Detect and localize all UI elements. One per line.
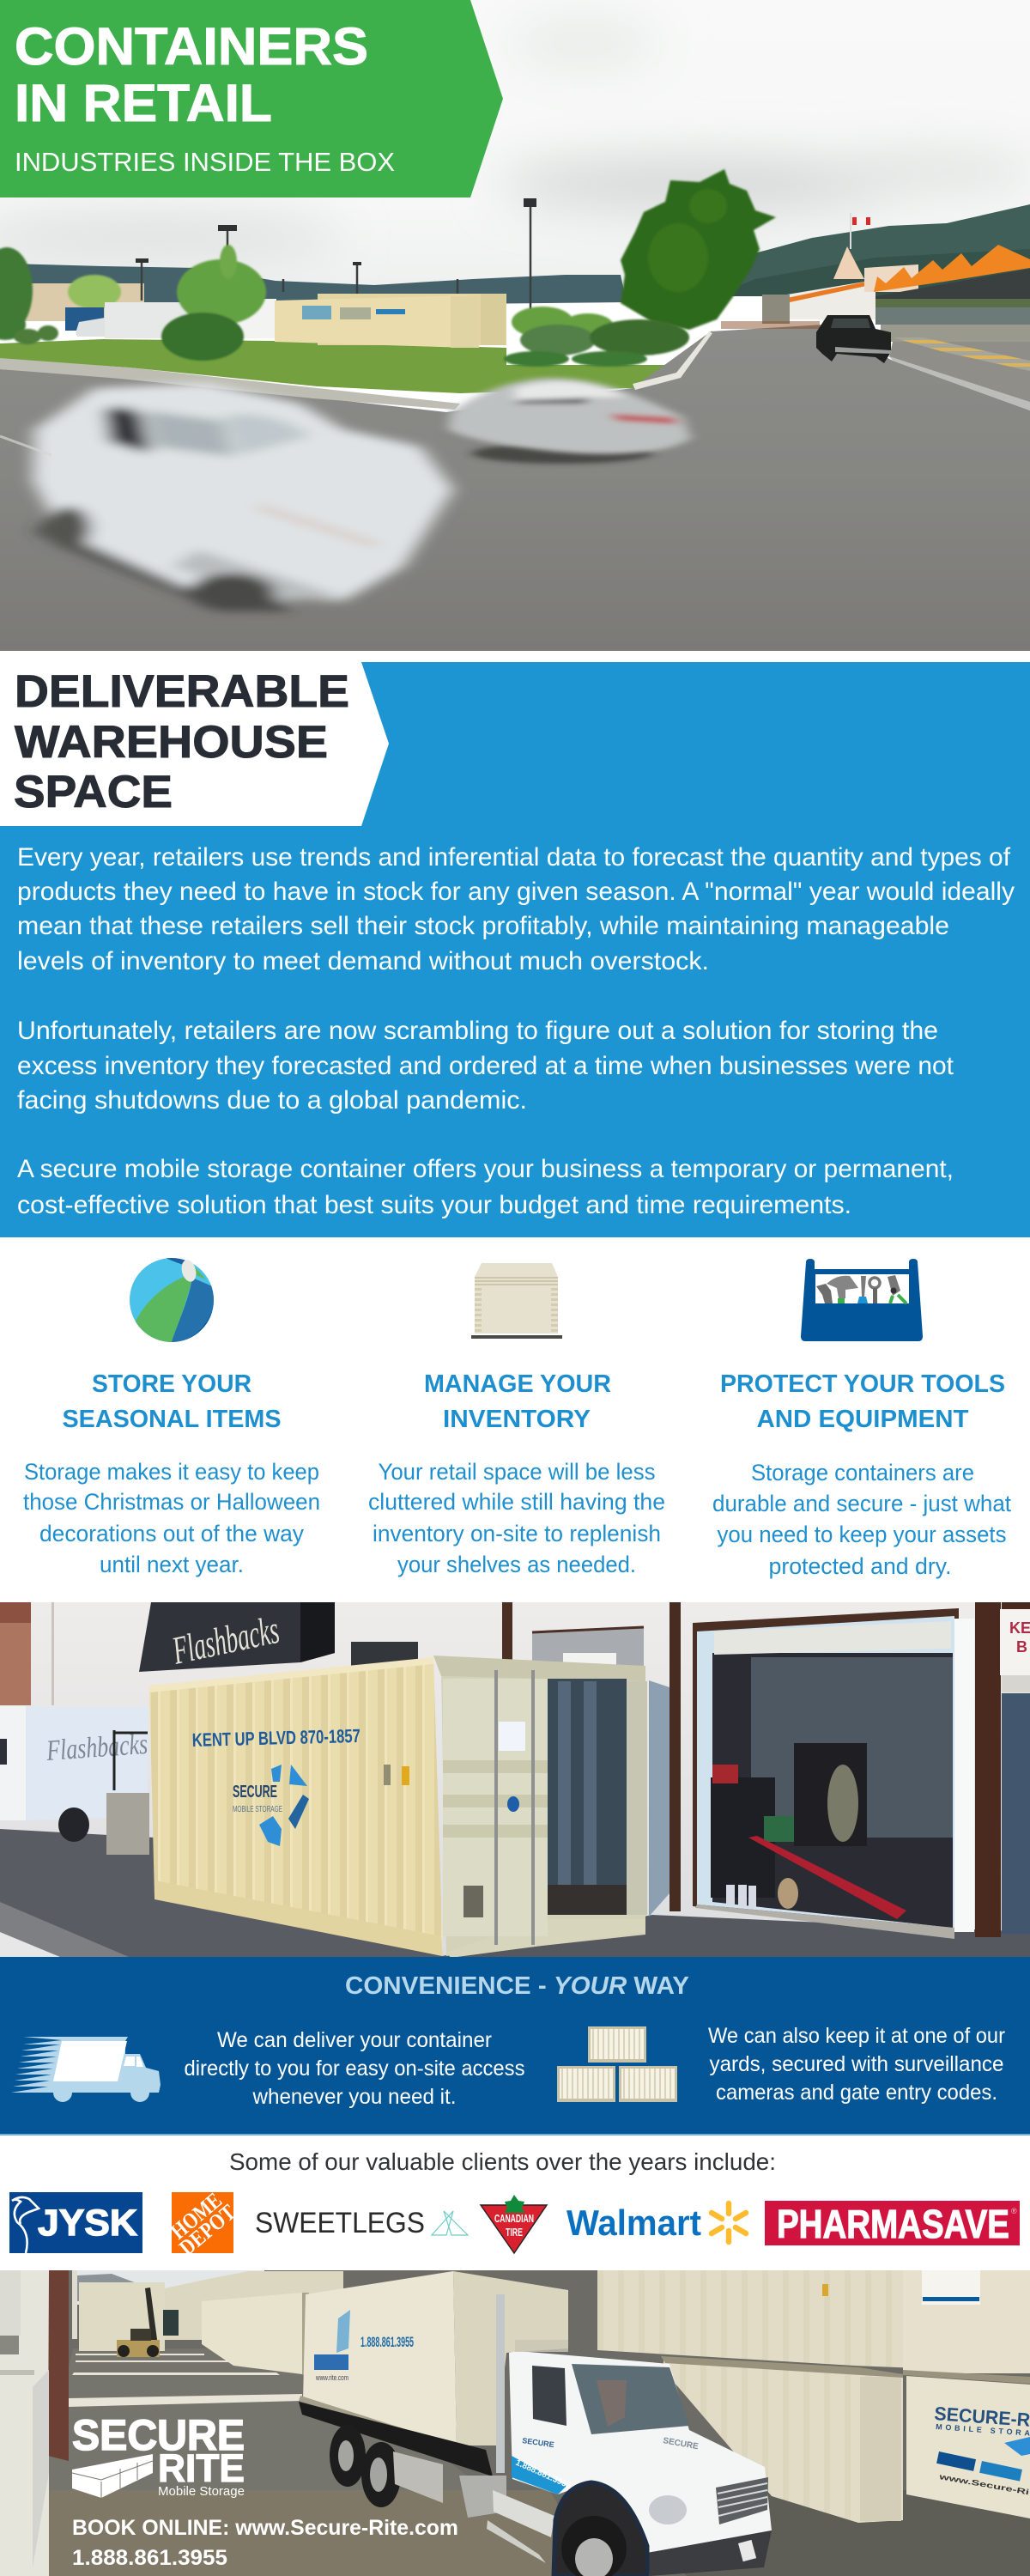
- logo: Sweetlegs: SWEETLEGS: [255, 2207, 425, 2239]
- yard text: yards, secured with surveillance: [709, 2052, 1004, 2076]
- description: those Christmas or Halloween: [23, 1489, 320, 1515]
- garage bay: [693, 1608, 974, 1939]
- feature: manage your inventory: [368, 1263, 665, 1577]
- description: until next year.: [100, 1552, 244, 1577]
- left tree: [0, 247, 33, 340]
- booking call to action: 1.888.861.3955: [72, 2546, 227, 2570]
- truck cab: [496, 2294, 772, 2576]
- white delivery truck: Flashbacks: [45, 1728, 148, 1767]
- headlight: [649, 2495, 687, 2524]
- heading: SEASONAL ITEMS: [62, 1406, 282, 1433]
- body paragraphs: [17, 843, 1015, 1219]
- description: inventory on-site to replenish: [373, 1521, 661, 1546]
- black pickup truck: [816, 315, 891, 363]
- dumpster and pickup: [65, 307, 104, 331]
- door logo: SECURE: [522, 2436, 554, 2449]
- title text: CONTAINERS: [15, 17, 368, 76]
- delivery text: whenever you need it.: [252, 2085, 457, 2109]
- grille: [716, 2477, 768, 2524]
- forklift: [117, 2287, 160, 2357]
- body paragraphs: products they need to have in stock for any given season. A "normal" year would ideally: [17, 878, 1015, 906]
- distant store buildings: [787, 281, 876, 319]
- windows: [351, 1642, 418, 1668]
- ground: [34, 2348, 618, 2576]
- Secure Rite logo: [72, 2411, 245, 2499]
- booking call to action: BOOK ONLINE: www.Secure-Rite.com: [72, 2516, 458, 2540]
- side wall: [149, 1659, 443, 1954]
- front wheel arch and wheel: [554, 2482, 647, 2576]
- heading: [62, 1370, 282, 1433]
- left foreground containers: [0, 2270, 77, 2576]
- description: decorations out of the way: [39, 1521, 305, 1546]
- Secure Rite logo: SECURE: [72, 2411, 245, 2459]
- description: protected and dry.: [769, 1553, 951, 1579]
- truck in distance: [762, 295, 790, 324]
- background container stacks: [79, 2271, 343, 2379]
- yard text: We can also keep it at one of our: [708, 2024, 1005, 2048]
- white trailer: [105, 302, 191, 338]
- heading: PROTECT YOUR TOOLS: [720, 1370, 1005, 1398]
- title text: [15, 17, 368, 132]
- flatbed and rear wheels: [299, 2402, 554, 2563]
- description: Storage containers are: [751, 1460, 974, 1485]
- heading: CONVENIENCE - YOUR WAY: [345, 1972, 689, 2000]
- photo: delivery truck in container yard: [0, 2270, 1030, 2576]
- lamp posts: [142, 201, 530, 309]
- door stripe: [512, 2456, 566, 2494]
- heading: [720, 1370, 1005, 1433]
- icon: toolbox: [801, 1259, 923, 1341]
- logo: Pharmasave: ®: [1011, 2207, 1017, 2215]
- white delivery truck: [0, 1706, 149, 1855]
- truck cab: SECURE: [662, 2436, 700, 2451]
- clients heading: Some of our valuable clients over the years include:: [229, 2148, 776, 2175]
- truck cargo container: [299, 2271, 568, 2449]
- hero photo: retail road with blurred cars: [0, 0, 1030, 651]
- panel: deliverable warehouse space: [0, 662, 1030, 1237]
- logo: Walmart: Walmart: [566, 2202, 701, 2243]
- nightclub sign: Flashbacks: [168, 1607, 282, 1673]
- icon: block stack: [72, 2454, 153, 2498]
- heading: AND EQUIPMENT: [757, 1406, 969, 1433]
- orange roof: [874, 245, 1030, 292]
- delivery text: directly to you for easy on-site access: [184, 2057, 525, 2081]
- delivery text: We can deliver your container: [217, 2028, 492, 2052]
- neighbouring sign: [1000, 1609, 1030, 1675]
- neighbouring sign: B: [1016, 1638, 1027, 1656]
- heading: [424, 1370, 611, 1433]
- description: [712, 1460, 1012, 1579]
- shrubs: [504, 307, 689, 367]
- subtitle: INDUSTRIES INSIDE THE BOX: [15, 147, 395, 177]
- heading: INVENTORY: [443, 1406, 591, 1433]
- body paragraphs: levels of inventory to meet demand without much overstock.: [17, 947, 709, 975]
- truck cab: 1.888.861.3955: [514, 2458, 573, 2491]
- flag: [851, 213, 870, 249]
- heading tab: [0, 662, 389, 826]
- nightclub sign: [139, 1602, 335, 1673]
- container on lot: [275, 294, 506, 348]
- small bush tree: [14, 245, 266, 361]
- jugs: [726, 1885, 735, 1905]
- bumper: [647, 2530, 772, 2576]
- side wall markings: KENT UP BLVD 870-1857: [191, 1725, 360, 1751]
- icon: container: [471, 1263, 562, 1339]
- description: cluttered while still having the: [368, 1489, 665, 1515]
- description: your shelves as needed.: [397, 1552, 636, 1577]
- icon: beach ball: [130, 1258, 214, 1342]
- road surface: [0, 325, 1030, 651]
- photo: container at nightclub loading bay: [0, 1602, 1030, 1958]
- body paragraphs: mean that these retailers sell their stock profitably, while maintaining manageable: [17, 912, 949, 940]
- door frame and open doors: [441, 1666, 645, 1956]
- description: durable and secure - just what: [712, 1491, 1012, 1516]
- right container stacks: [597, 2270, 1030, 2523]
- heading: STORE YOUR: [92, 1370, 251, 1398]
- description: you need to keep your assets: [718, 1522, 1006, 1547]
- body paragraphs: excess inventory they forecasted and ordered at a time when businesses were not: [17, 1052, 954, 1080]
- truck cargo container: www.rite.com: [315, 2373, 348, 2382]
- logo: Canadian Tire: TIRE: [506, 2226, 523, 2239]
- blurred white car: [33, 383, 453, 611]
- heading tab: SPACE: [14, 767, 173, 817]
- title banner: [0, 0, 503, 197]
- logo: Home Depot: DEPOT: [174, 2200, 240, 2261]
- building posts: [502, 1602, 512, 1662]
- retaining wall: [881, 325, 1030, 342]
- description: [23, 1459, 320, 1577]
- asphalt: [0, 1829, 446, 1957]
- Secure Rite logo: RITE: [158, 2446, 245, 2490]
- icon: stacked containers: [557, 2026, 677, 2102]
- body paragraphs: Unfortunately, retailers are now scrambling to figure out a solution for storing the: [17, 1017, 938, 1045]
- yard text: [708, 2024, 1005, 2105]
- parking lot hatch markings: [893, 337, 1030, 371]
- feature: store your seasonal items: [23, 1257, 320, 1577]
- red ramp: [748, 1836, 906, 1919]
- body paragraphs: facing shutdowns due to a global pandemic.: [17, 1086, 527, 1115]
- panel: convenience your way: [0, 1957, 1030, 2136]
- logo: Canadian Tire: CANADIAN: [494, 2212, 534, 2225]
- logo: Canadian Tire: [481, 2195, 547, 2253]
- body paragraphs: cost-effective solution that best suits your budget and time requirements.: [17, 1191, 851, 1219]
- right container stacks: www.Secure-Ri: [937, 2472, 1030, 2496]
- client logos: [9, 2188, 1020, 2261]
- logo on container: [233, 1765, 309, 1846]
- blurred silver car: [448, 378, 691, 464]
- sky and mountain: [76, 2270, 264, 2305]
- booking call to action: [72, 2516, 458, 2570]
- side and front windows: [532, 2366, 566, 2426]
- logo: JYSK: JYSK: [38, 2202, 137, 2244]
- logo on container: MOBILE STORAGE: [233, 1805, 282, 1814]
- Secure Rite logo: Mobile Storage: [158, 2484, 245, 2499]
- description: Storage makes it easy to keep: [24, 1459, 319, 1485]
- truck cargo container: 1.888.861.3955: [360, 2334, 414, 2350]
- yard text: cameras and gate entry codes.: [716, 2081, 997, 2105]
- right container stacks: MOBILE STORA: [936, 2422, 1030, 2438]
- right hinged door: [649, 1680, 670, 1917]
- logo: JYSK: [9, 2192, 142, 2253]
- white stripes on ground: [69, 2354, 302, 2407]
- grass verge: [0, 331, 712, 393]
- heading: MANAGE YOUR: [424, 1370, 611, 1398]
- heading tab: DELIVERABLE: [15, 666, 349, 717]
- shipping container: [149, 1656, 670, 1958]
- body paragraphs: A secure mobile storage container offers your business a temporary or permanent,: [17, 1155, 954, 1183]
- logo on container: SECURE: [233, 1783, 277, 1801]
- large tree: [621, 169, 776, 330]
- description: [368, 1459, 665, 1577]
- logo: Home Depot: HOME: [166, 2188, 227, 2245]
- description: Your retail space will be less: [378, 1459, 656, 1485]
- delivery text: [184, 2028, 525, 2109]
- brick wall: [0, 1623, 31, 1705]
- icon: speeding truck: [11, 2037, 161, 2102]
- feature: protect your tools and equipment: [712, 1259, 1012, 1579]
- curb: [0, 358, 460, 410]
- container markings: [336, 2310, 350, 2353]
- title text: IN RETAIL: [15, 74, 272, 132]
- left building: [19, 283, 144, 321]
- body paragraphs: Every year, retailers use trends and inferential data to forecast the quantity and types of: [17, 843, 1011, 872]
- lane line: [0, 436, 52, 455]
- heading tab: WAREHOUSE: [15, 717, 328, 768]
